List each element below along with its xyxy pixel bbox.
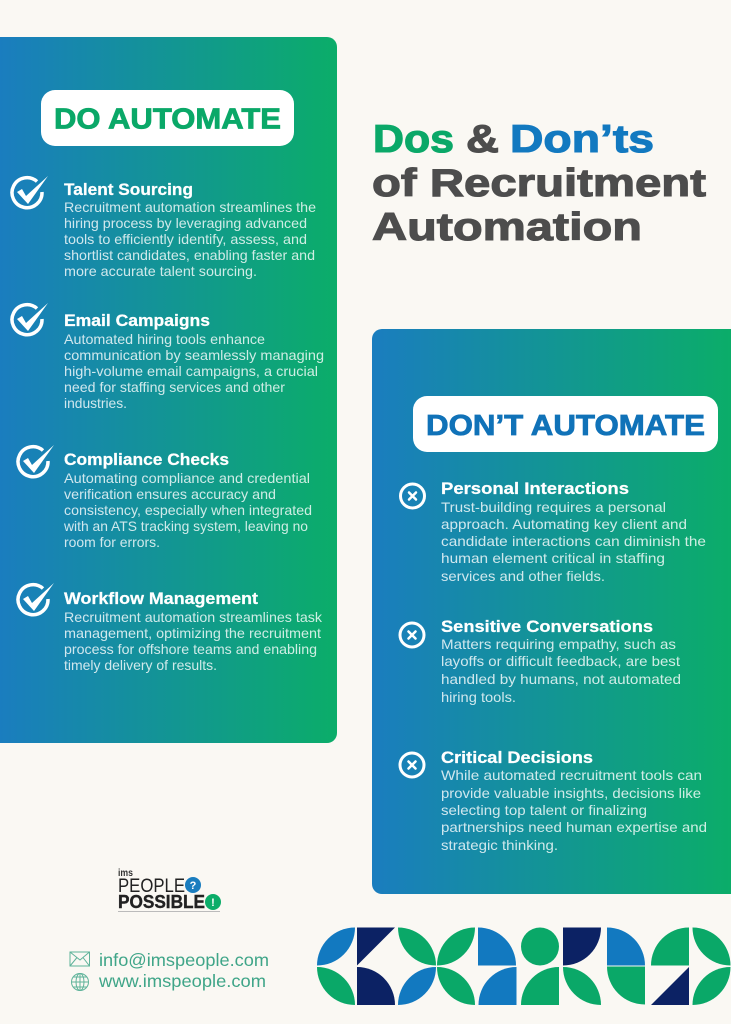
icon: check compliance checks: [18, 445, 54, 477]
heading pill: don't automate: DON’T AUTOMATE: [426, 410, 705, 442]
item: compliance checks: verification ensures accuracy and: [64, 486, 276, 502]
item: workflow management: [64, 590, 323, 673]
item: talent sourcing: shortlist candidates, enabling faster and: [64, 247, 315, 263]
item: workflow management: management, optimizing the recruitment: [64, 625, 321, 641]
item: critical decisions: partnerships need human expertise and: [441, 819, 707, 835]
icon: x sensitive conversations: [400, 623, 424, 647]
title: [372, 118, 706, 249]
item: personal interactions: services and other fields.: [441, 568, 605, 584]
item: personal interactions: [441, 480, 706, 584]
title: &: [466, 118, 499, 161]
icon: check email campaigns: [12, 303, 48, 335]
logo: ims people possible: POSSIBLE: [118, 891, 205, 912]
item: email campaigns: [64, 312, 324, 411]
title: of Recruitment: [372, 162, 706, 205]
item: personal interactions: Personal Interactions: [441, 480, 629, 498]
item: talent sourcing: Recruitment automation streamlines the: [64, 199, 316, 215]
item: workflow management: Workflow Management: [64, 590, 259, 608]
item: compliance checks: [63, 451, 312, 550]
item: compliance checks: Automating compliance and credential: [64, 470, 310, 486]
item: talent sourcing: hiring process by leveraging advanced: [64, 215, 307, 231]
panel: do automate: [0, 37, 337, 743]
item: email campaigns: need for staffing services and other: [64, 379, 285, 395]
item: compliance checks: Compliance Checks: [64, 451, 229, 469]
title: Don’ts: [510, 118, 654, 161]
item: email campaigns: high-volume email campaigns, a crucial: [64, 363, 318, 379]
item: critical decisions: [441, 749, 707, 853]
item: workflow management: timely delivery of results.: [64, 657, 217, 673]
contact: email: info@imspeople.com: [99, 950, 269, 970]
item: workflow management: Recruitment automation streamlines task: [64, 609, 323, 625]
decorative geometric pattern: [317, 928, 730, 1005]
contact: website: www.imspeople.com: [98, 971, 266, 991]
item: compliance checks: room for errors.: [64, 534, 160, 550]
icon: check talent sourcing: [12, 176, 48, 208]
item: sensitive conversations: Matters requiring empathy, such as: [441, 636, 676, 652]
item: talent sourcing: Talent Sourcing: [64, 181, 193, 199]
title: Dos: [373, 118, 454, 161]
item: sensitive conversations: hiring tools.: [441, 689, 516, 705]
heading pill: do automate: [41, 90, 294, 146]
item: personal interactions: candidate interactions can diminish the: [441, 533, 706, 549]
logo: ims people possible: !: [211, 897, 215, 909]
item: personal interactions: approach. Automating key client and: [441, 516, 687, 532]
icon: x critical decisions: [400, 753, 424, 777]
item: sensitive conversations: layoffs or difficult feedback, are best: [441, 653, 680, 669]
logo: ims people possible: ?: [190, 880, 197, 892]
item: talent sourcing: more accurate talent sourcing.: [64, 263, 257, 279]
item: sensitive conversations: [441, 618, 681, 705]
item: sensitive conversations: Sensitive Conversations: [441, 618, 653, 636]
item: email campaigns: Automated hiring tools enhance: [64, 331, 265, 347]
logo: ims people possible: ims: [118, 868, 133, 879]
item: critical decisions: strategic thinking.: [441, 837, 558, 853]
item: critical decisions: While automated recruitment tools can: [441, 767, 702, 783]
item: talent sourcing: [64, 181, 316, 279]
heading pill: do automate: DO AUTOMATE: [54, 104, 281, 136]
item: workflow management: process for offshore teams and enabling: [64, 641, 317, 657]
panel: don't automate: [372, 329, 731, 894]
item: personal interactions: human element critical in staffing: [441, 550, 665, 566]
item: compliance checks: consistency, especially when integrated: [64, 502, 312, 518]
heading pill: don't automate: [413, 396, 718, 452]
item: personal interactions: Trust-building requires a personal: [441, 499, 666, 515]
item: critical decisions: Critical Decisions: [441, 749, 593, 767]
item: talent sourcing: tools to efficiently identify, assess, and: [64, 231, 307, 247]
item: sensitive conversations: handled by humans, not automated: [441, 671, 681, 687]
item: critical decisions: provide valuable insights, decisions like: [441, 785, 701, 801]
logo: ims people possible: [118, 868, 221, 912]
item: email campaigns: Email Campaigns: [64, 312, 210, 330]
logo: ims people possible: PEOPLE: [118, 876, 185, 897]
item: email campaigns: industries.: [64, 395, 127, 411]
item: critical decisions: selecting top talent or finalizing: [441, 802, 647, 818]
title: Automation: [372, 206, 642, 249]
item: compliance checks: with an ATS tracking system, leaving no: [63, 518, 308, 534]
icon: x personal interactions: [400, 484, 424, 508]
item: email campaigns: communication by seamlessly managing: [64, 347, 324, 363]
icon: check workflow management: [18, 583, 54, 615]
